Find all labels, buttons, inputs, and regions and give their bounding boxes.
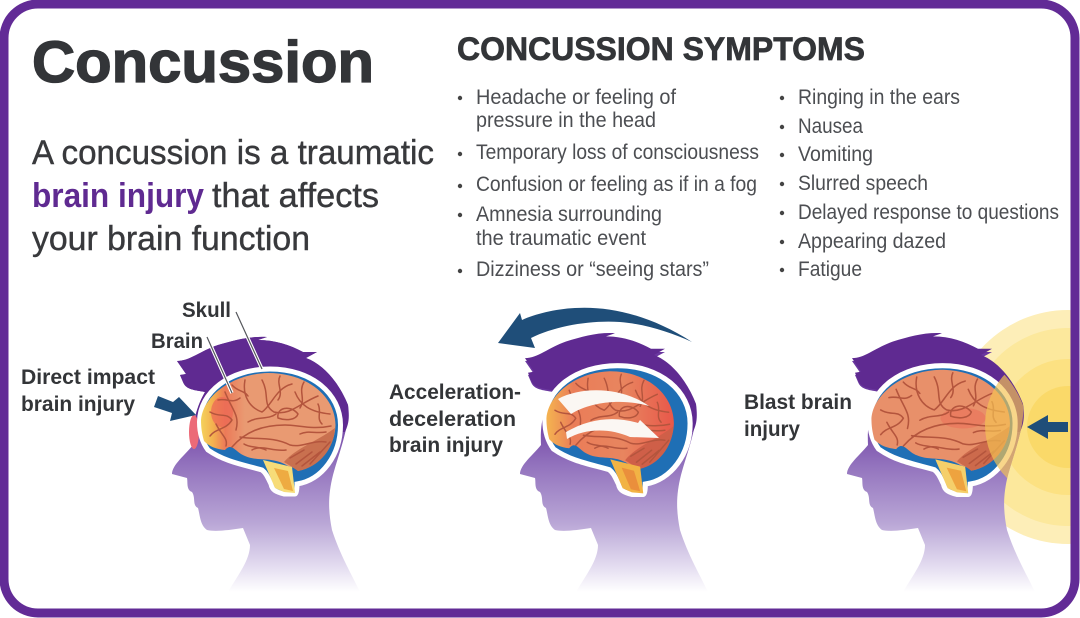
title: Concussion bbox=[32, 30, 374, 95]
label: acceleration-deceleration bbox=[389, 381, 521, 457]
arrow: blast bbox=[1027, 415, 1068, 439]
label: skull: Skull bbox=[182, 299, 231, 322]
symptoms list: right column: Delayed response to questions bbox=[798, 201, 1059, 224]
label: acceleration-deceleration: brain injury bbox=[389, 434, 503, 457]
head: direct impact bbox=[172, 337, 360, 592]
symptoms list: right column: Vomiting bbox=[798, 143, 873, 166]
label: blast: Blast brain bbox=[744, 391, 852, 414]
label: direct impact bbox=[21, 366, 155, 416]
intro statement: A concussion is a traumatic bbox=[32, 134, 434, 172]
label: brain: Brain bbox=[151, 330, 203, 353]
symptoms list: left column: Confusion or feeling as if in a fog bbox=[476, 173, 757, 196]
arrow: acceleration bbox=[498, 308, 692, 348]
blast wave rings bbox=[981, 310, 1070, 544]
symptoms list: left column: Dizziness or “seeing stars” bbox=[476, 258, 709, 281]
symptoms list: left column: Amnesia surrounding bbox=[476, 203, 662, 226]
skull and brain leader lines bbox=[207, 312, 262, 393]
symptoms list: left column: Temporary loss of consciousness bbox=[476, 141, 759, 164]
symptoms heading: CONCUSSION SYMPTOMS bbox=[457, 31, 865, 67]
symptoms list: right column bbox=[780, 86, 1059, 281]
intro statement bbox=[32, 134, 434, 258]
intro statement: brain injury bbox=[32, 177, 204, 215]
symptoms list: right column: Nausea bbox=[798, 115, 863, 138]
label: acceleration-deceleration: deceleration bbox=[389, 408, 516, 431]
intro statement: your brain function bbox=[32, 220, 310, 258]
label: blast: injury bbox=[744, 418, 800, 441]
symptoms list: right column: Fatigue bbox=[798, 258, 862, 281]
label: direct impact: brain injury bbox=[21, 393, 135, 416]
label: blast bbox=[744, 391, 852, 441]
white motion arrows in brain bbox=[558, 390, 659, 439]
symptoms list: left column: pressure in the head bbox=[476, 109, 656, 132]
head: blast bbox=[847, 333, 1035, 592]
label: direct impact: Direct impact bbox=[21, 366, 155, 389]
label: acceleration-deceleration: Acceleration- bbox=[389, 381, 521, 404]
symptoms list: left column: the traumatic event bbox=[476, 227, 646, 250]
head: acceleration-deceleration bbox=[520, 333, 708, 592]
arrow: direct impact bbox=[154, 396, 196, 421]
symptoms list: left column bbox=[458, 86, 759, 281]
intro statement: that affects bbox=[212, 177, 379, 215]
blast overlay on head bbox=[985, 374, 1024, 478]
symptoms list: right column: Appearing dazed bbox=[798, 230, 946, 253]
symptoms list: right column: Ringing in the ears bbox=[798, 86, 960, 109]
symptoms list: right column: Slurred speech bbox=[798, 172, 928, 195]
symptoms list: left column: Headache or feeling of bbox=[476, 86, 676, 109]
